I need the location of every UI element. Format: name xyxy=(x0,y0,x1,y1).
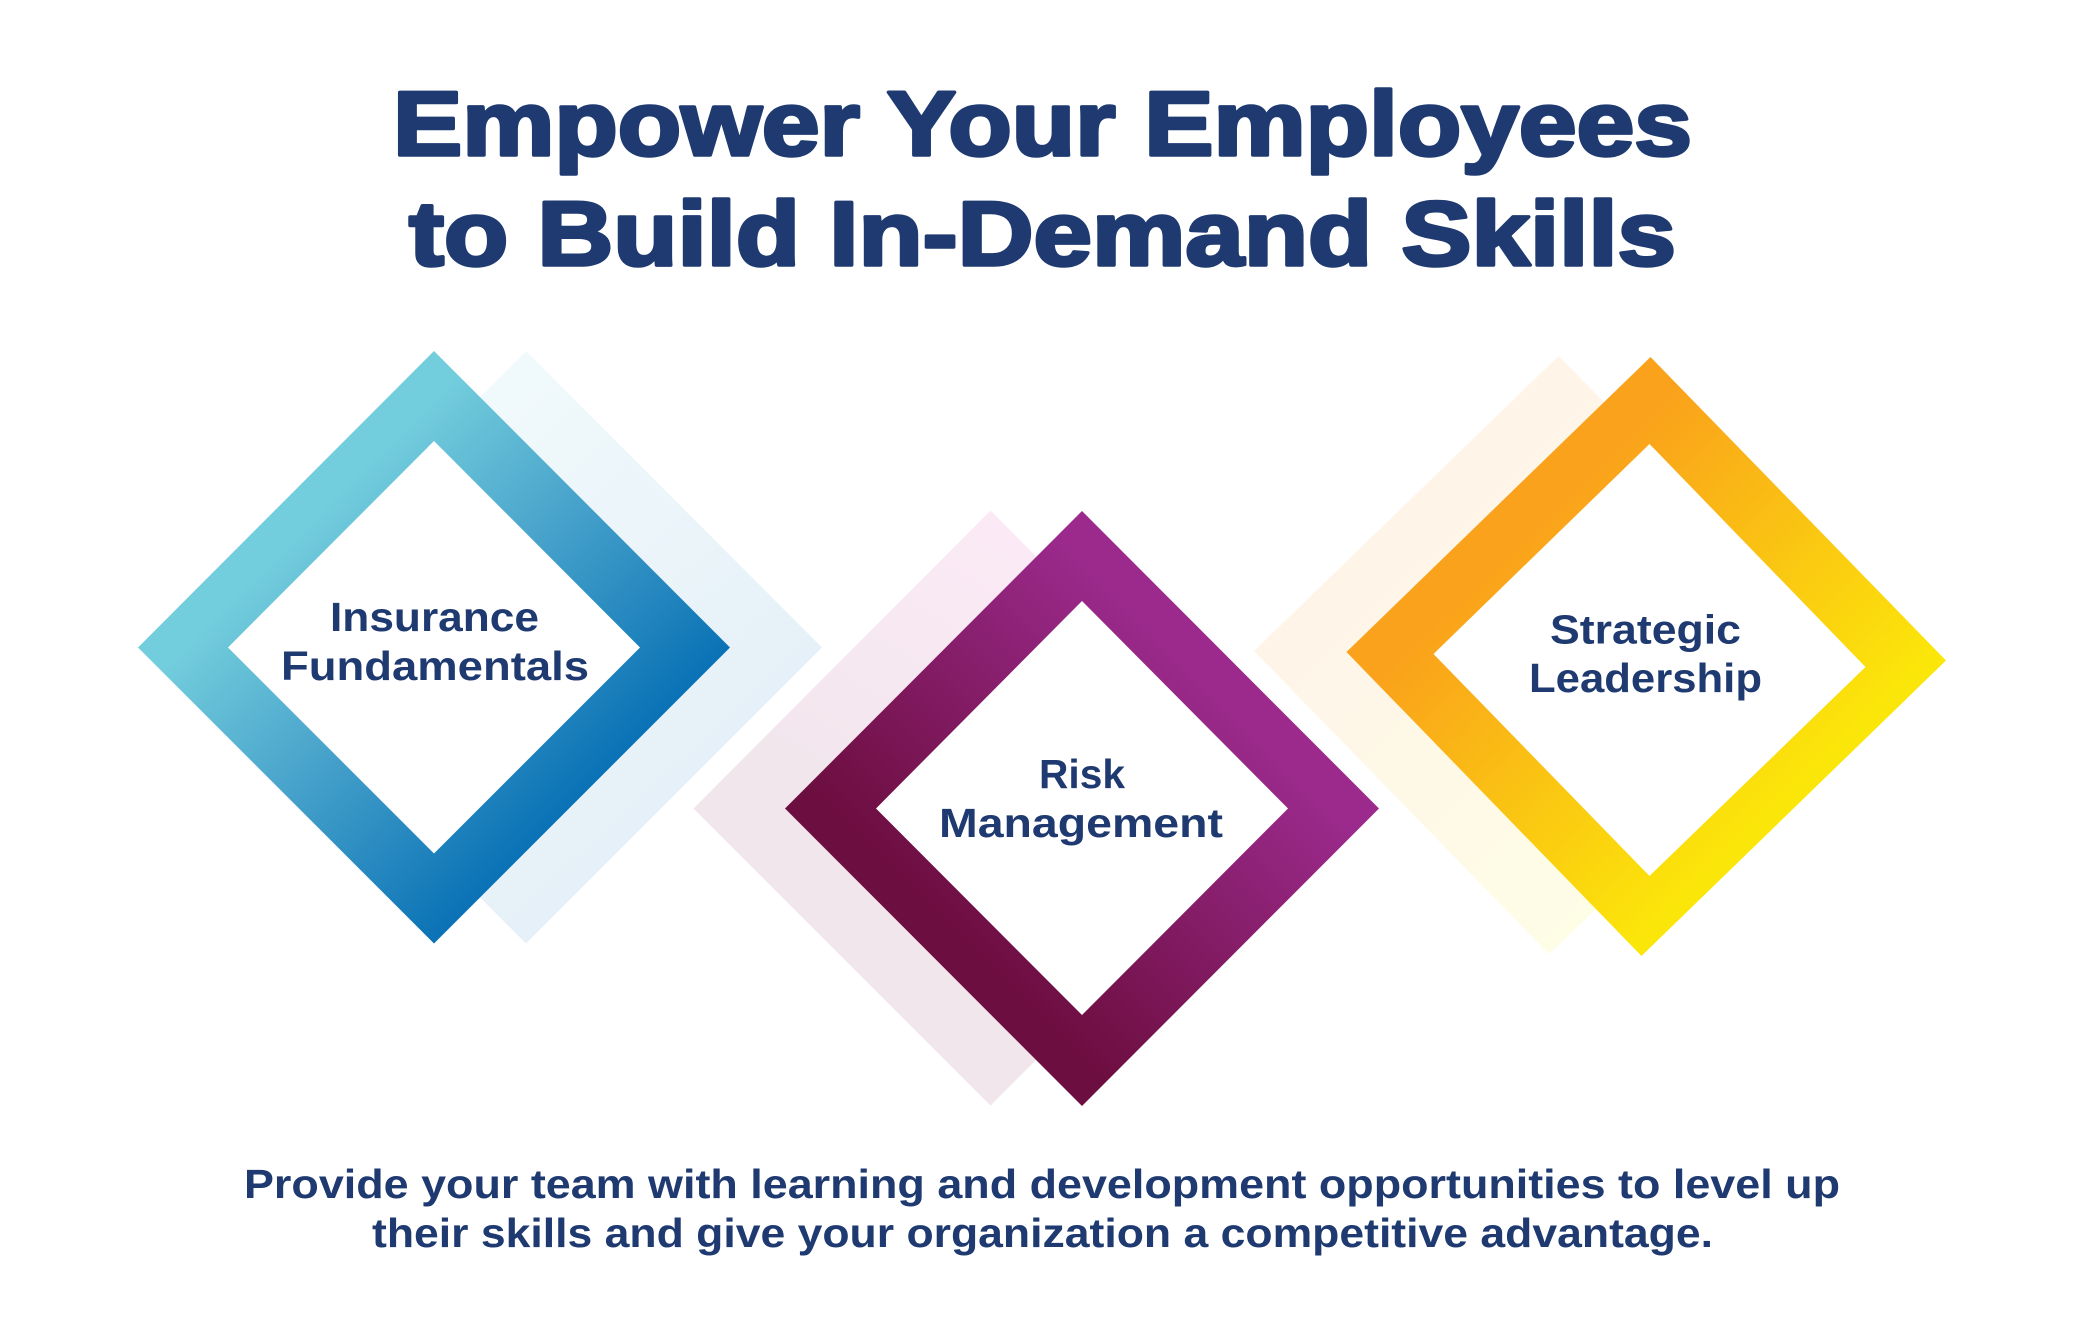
label: Strategic Leadership: Leadership xyxy=(1529,655,1762,701)
label: Risk Management xyxy=(939,751,1223,846)
title xyxy=(393,74,1692,285)
title: to Build In-Demand Skills xyxy=(409,184,1676,285)
label: Insurance Fundamentals: Insurance xyxy=(330,594,539,640)
diamond: Insurance Fundamentals xyxy=(138,351,730,944)
diamond: Risk Management xyxy=(785,511,1379,1106)
diamond: Strategic Leadership xyxy=(1346,357,1946,956)
faded diamond: purple xyxy=(694,510,1287,1106)
label: Strategic Leadership: Strategic xyxy=(1550,606,1741,652)
title: Empower Your Employees xyxy=(393,74,1692,175)
closing statement: Provide your team with learning and development opportunities to level up xyxy=(244,1161,1840,1207)
label: Risk Management: Risk xyxy=(1039,751,1125,797)
faded diamond: orange xyxy=(1254,356,1858,954)
label: Risk Management: Management xyxy=(939,800,1223,846)
label: Insurance Fundamentals: Fundamentals xyxy=(281,643,589,689)
faded diamond: blue xyxy=(230,351,822,944)
label: Insurance Fundamentals xyxy=(281,594,589,689)
closing statement xyxy=(244,1161,1840,1256)
label: Strategic Leadership xyxy=(1529,606,1762,701)
closing statement: their skills and give your organization a competitive advantage. xyxy=(372,1210,1713,1256)
